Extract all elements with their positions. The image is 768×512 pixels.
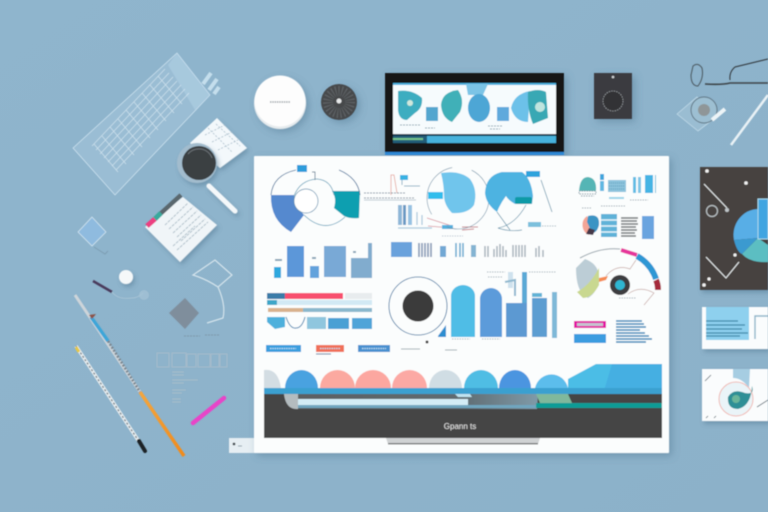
icon: small glass diamond <box>78 217 108 254</box>
decorative faint caption <box>184 335 220 336</box>
chart: left stacked strips <box>267 293 372 329</box>
legend chips row <box>266 345 457 354</box>
footer band: dark bar <box>264 394 662 438</box>
chart: centre pie <box>427 167 489 229</box>
chart: tall rounded bars <box>451 272 557 339</box>
icon: white round device <box>254 76 306 129</box>
chart: circle with dark centre <box>389 277 447 344</box>
icon: white marker <box>209 186 235 211</box>
ghost table <box>157 353 227 402</box>
footer band: blue mountain block <box>264 364 662 404</box>
pie chart on dark card <box>734 199 768 262</box>
icon: notebook with pen <box>145 195 217 262</box>
chart: second blob with callout <box>485 171 556 231</box>
icon: paper sheet behind cup <box>190 118 247 168</box>
icon: transparent keyboard <box>73 53 219 195</box>
icon: small tab left of panel <box>229 438 259 453</box>
chart: right mini pie and table <box>582 214 654 239</box>
icon: magenta highlighter <box>193 398 224 423</box>
footer label: Gpann ts <box>444 422 476 431</box>
icon: wire frame <box>193 260 232 323</box>
chart: left bars <box>274 243 372 278</box>
chart: small bars row <box>391 242 543 257</box>
annotation cluster by donut <box>364 175 478 236</box>
icon: small dark box <box>594 73 632 119</box>
panel: dark chart card <box>700 167 768 290</box>
monitor screen <box>393 83 556 143</box>
monitor stand on sheet <box>386 438 540 444</box>
panel: main dashboard sheet <box>254 156 669 453</box>
icon: grey dotted diamond <box>169 298 199 329</box>
footer band: scalloped tabs <box>264 370 568 388</box>
panel: small card with spiral <box>702 369 768 421</box>
icon: dark stylus with loop <box>93 281 149 300</box>
icon: white ball <box>119 270 133 284</box>
monitor <box>385 73 564 155</box>
icon: long pencil with orange end <box>75 295 184 456</box>
icon: second pencil with black tip <box>76 346 145 451</box>
icon: white pen right <box>731 95 768 145</box>
chart: right mini group top <box>579 174 656 208</box>
chart: right gauge <box>576 249 658 305</box>
panel: small card with table <box>702 307 768 349</box>
icon: dark speaker ball <box>321 84 357 120</box>
icon: glasses and lens <box>677 59 768 131</box>
icon: coffee cup <box>177 143 217 183</box>
chart: left donut <box>271 165 360 232</box>
chart: right bottom chips and text lines <box>574 321 652 343</box>
